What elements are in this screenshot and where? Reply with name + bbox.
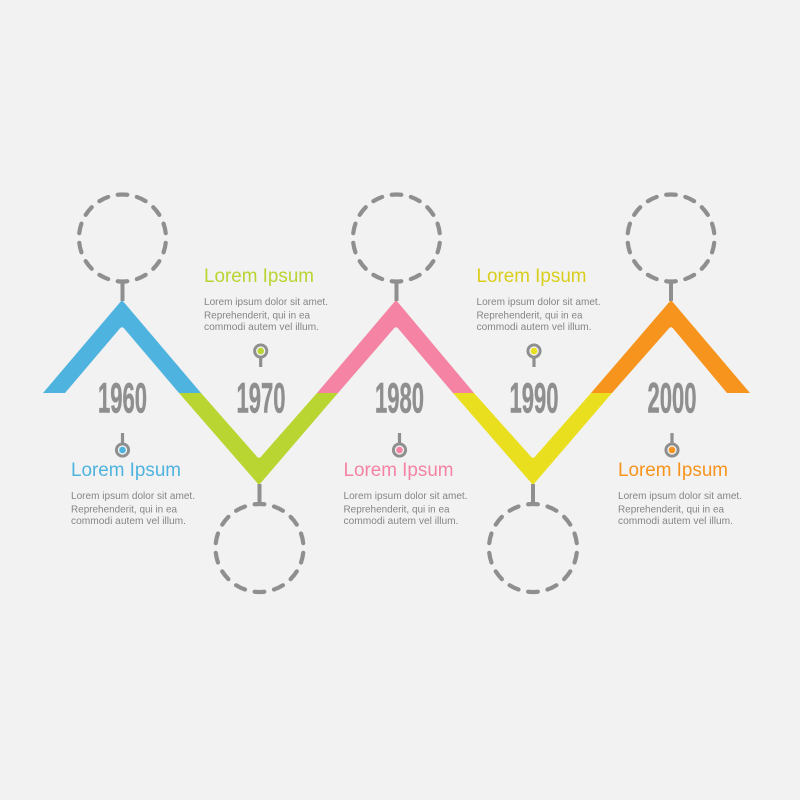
text block: 1970: Lorem Ipsum [204, 266, 314, 287]
year: 1960: 1960 [98, 374, 147, 422]
text block: 1970: Lorem ipsum dolor sit amet. [204, 296, 328, 308]
ribbon segment: pink [317, 300, 474, 393]
ribbon segment: orange [591, 300, 750, 393]
text block: 1990: Reprehenderit, qui in ea [476, 310, 583, 322]
ribbon segment: yellow [453, 393, 612, 485]
text block: 1970 [204, 266, 328, 333]
year: 2000: 2000 [648, 374, 696, 422]
zigzag timeline ribbon [43, 300, 750, 485]
text block: 1960: commodi autem vel illum. [71, 515, 186, 527]
year: 1990: 1990 [510, 374, 558, 422]
text block: 1960: Reprehenderit, qui in ea [71, 504, 177, 516]
text block: 1970: Reprehenderit, qui in ea [204, 310, 310, 322]
text block: 1960: Lorem ipsum dolor sit amet. [71, 490, 195, 502]
text block: 1990: commodi autem vel illum. [476, 321, 592, 333]
text block: 2000: Lorem Ipsum [618, 460, 728, 481]
year: 1970: 1970 [236, 374, 286, 422]
pin icon: green [255, 345, 267, 367]
text block: 1960 [71, 460, 195, 527]
text block: 1990: Lorem Ipsum [476, 266, 586, 287]
text block: 2000: commodi autem vel illum. [618, 515, 733, 527]
text block: 1980: commodi autem vel illum. [344, 515, 458, 527]
dashed circle connector 1990 [489, 484, 577, 592]
pin icon: blue [116, 433, 129, 456]
dashed circle connector 1980 [353, 194, 440, 301]
ribbon segment: blue [43, 300, 201, 393]
text block: 2000 [618, 460, 742, 527]
text block: 1970: commodi autem vel illum. [204, 321, 319, 333]
dashed circle connector 1960 [79, 194, 166, 301]
year: 1980: 1980 [375, 374, 424, 422]
text block: 1990 [476, 266, 600, 333]
pin icon: pink [393, 433, 406, 456]
text block: 2000: Lorem ipsum dolor sit amet. [618, 490, 742, 502]
text block: 1980: Reprehenderit, qui in ea [344, 504, 450, 516]
pin icon: yellow [528, 345, 540, 367]
dashed circle connector 1970 [216, 484, 304, 592]
text block: 1990: Lorem ipsum dolor sit amet. [476, 296, 600, 308]
text block: 1980: Lorem Ipsum [344, 460, 454, 481]
text block: 2000: Reprehenderit, qui in ea [618, 504, 724, 516]
text block: 1980 [344, 460, 468, 527]
text block: 1980: Lorem ipsum dolor sit amet. [344, 490, 468, 502]
pin icon: orange [666, 433, 678, 456]
ribbon segment: green [179, 393, 338, 485]
text block: 1960: Lorem Ipsum [71, 460, 181, 481]
dashed circle connector 2000 [628, 194, 714, 301]
